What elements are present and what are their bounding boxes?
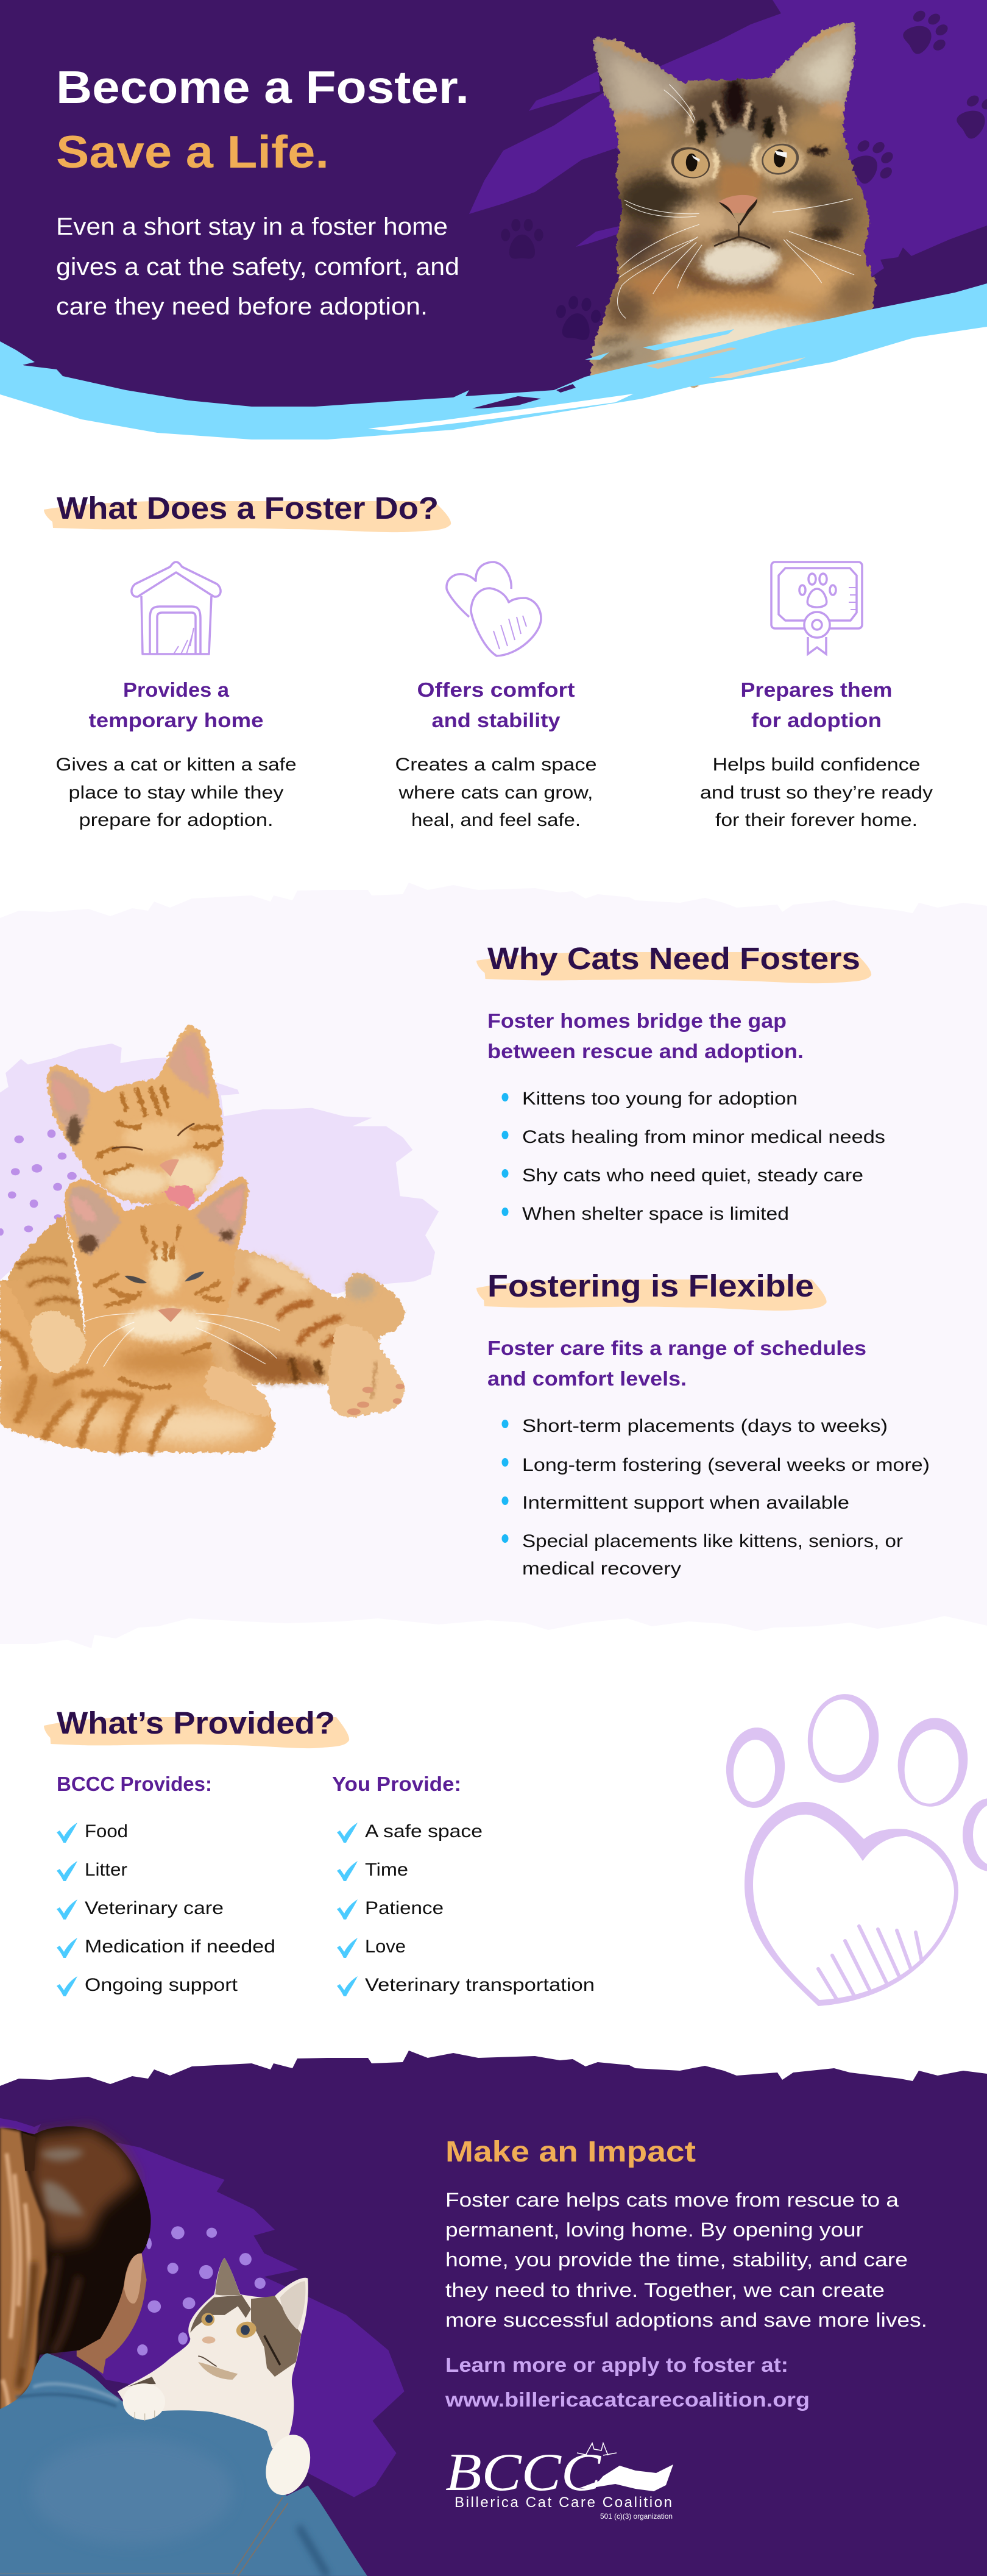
cheek markings — [618, 174, 694, 229]
panel: prepares them for adoption — [700, 562, 933, 830]
list: BCCC provides — [57, 1773, 275, 1996]
cat body — [118, 2258, 308, 2449]
icon: hearts — [447, 562, 541, 656]
illustration: woman holding cat — [0, 2118, 405, 2576]
panel: prepares them for adoption: and trust so they’re ready — [700, 783, 933, 803]
ears — [593, 38, 684, 123]
panel: offers comfort and stability: Offers comfort — [417, 678, 575, 701]
top kitten body and arm — [7, 1213, 85, 1373]
top kitten markings — [98, 1087, 221, 1174]
chin — [702, 241, 781, 284]
whiskers — [617, 84, 861, 318]
bullet list: placement types: Intermittent support when available — [522, 1493, 849, 1513]
logo: Billerica Cat Care Coalition: Billerica Cat Care Coalition — [455, 2494, 672, 2511]
icon: large paw with heart pad — [724, 1690, 987, 2006]
paws — [327, 1325, 405, 1418]
paint stroke: blue swoosh — [0, 283, 987, 439]
title: Save a Life. — [56, 126, 329, 177]
list: BCCC provides: Litter — [85, 1860, 127, 1880]
panel: prepares them for adoption: for their forever home. — [715, 810, 918, 830]
eye patches — [665, 146, 717, 185]
muzzle — [718, 166, 762, 201]
heading: make an impact: Make an Impact — [445, 2136, 696, 2168]
forehead stripes — [724, 77, 746, 124]
list: you provide: You Provide: — [332, 1773, 461, 1795]
bullet list: placement types: Special placements like kittens, seniors, or — [522, 1531, 903, 1551]
back body and tail — [196, 1251, 405, 1418]
call to action: Learn more or apply to foster at: — [445, 2354, 788, 2376]
cat paws — [123, 2383, 165, 2420]
heading: what does a foster do: What Does a Foster Do? — [57, 491, 439, 525]
nose — [714, 195, 770, 248]
panel: lavender band — [0, 883, 987, 1648]
panel: provides a temporary home: place to stay while they — [68, 783, 284, 803]
logo: Billerica Cat Care Coalition: 501 (c)(3) organization — [600, 2512, 673, 2521]
icon: house — [132, 562, 221, 654]
faces and toes — [84, 1123, 405, 1415]
bullet list: placement types: Short-term placements (days to weeks) — [522, 1416, 888, 1436]
ruff — [677, 265, 791, 291]
illustration: kittens on lavender brush — [0, 1025, 439, 1453]
panel: offers comfort and stability: where cats can grow, — [398, 783, 593, 803]
brush stroke — [0, 2118, 405, 2497]
logo: Billerica Cat Care Coalition: BCCC — [445, 2443, 601, 2502]
panel: offers comfort and stability: heal, and feel safe. — [411, 810, 581, 830]
panel: footer make an impact — [0, 2051, 987, 2576]
intro text: gives a cat the safety, comfort, and — [56, 254, 459, 280]
panel: provides a temporary home: prepare for adoption. — [79, 810, 273, 830]
intro text: Even a short stay in a foster home — [56, 213, 448, 240]
cat markings — [251, 2296, 301, 2377]
heading: what's provided: What’s Provided? — [57, 1706, 335, 1740]
hair — [0, 2126, 151, 2512]
panel: offers comfort and stability: Creates a calm space — [395, 755, 597, 775]
list: BCCC provides: Veterinary care — [85, 1898, 224, 1918]
panel: provides a temporary home: temporary home — [89, 709, 263, 731]
heading: fostering is flexible: Fostering is Flexible — [487, 1268, 814, 1303]
panel: hero header — [0, 0, 987, 439]
icon: paw certificate with ribbon — [771, 562, 862, 654]
panel: offers comfort and stability: and stability — [431, 709, 561, 731]
heading: what's provided — [44, 1706, 349, 1748]
denim jacket — [0, 2354, 367, 2576]
panel: provides a temporary home: Provides a — [123, 678, 230, 701]
head fur — [680, 82, 794, 136]
list: you provide — [332, 1773, 595, 1996]
panel: prepares them for adoption: Helps build confidence — [713, 755, 920, 775]
panel: prepares them for adoption: for adoption — [751, 709, 882, 731]
bottom kitten — [0, 1177, 275, 1453]
body text: impact paragraph — [445, 2189, 927, 2331]
kitten bodies — [0, 1025, 405, 1453]
paw prints — [501, 2, 987, 342]
list: you provide: Love — [365, 1937, 406, 1957]
ponytail — [0, 2127, 47, 2512]
bullet list: placement types: medical recovery — [522, 1559, 681, 1579]
bottom kitten markings — [95, 1227, 221, 1387]
skin: face, neck and ear — [77, 2244, 147, 2374]
top kitten head — [47, 1025, 223, 1206]
body stripes — [0, 1333, 174, 1451]
bullet list: who needs fostering: Shy cats who need quiet, steady care — [522, 1165, 863, 1186]
list: you provide: A safe space — [365, 1821, 483, 1841]
list: BCCC provides: BCCC Provides: — [57, 1773, 212, 1795]
bullet list: who needs fostering — [502, 1089, 885, 1224]
photo: tabby cat — [582, 13, 882, 394]
list: you provide: Patience — [365, 1898, 444, 1918]
intro text: care they need before adoption. — [56, 293, 428, 320]
bullet list: placement types — [502, 1416, 930, 1579]
subheading: bridge the gap — [487, 1009, 804, 1062]
tongue — [162, 1185, 196, 1209]
subheading: bridge the gap: Foster homes bridge the gap — [487, 1009, 787, 1032]
dots — [137, 2226, 266, 2355]
title — [56, 62, 469, 177]
subheading: schedules: and comfort levels. — [487, 1367, 687, 1390]
eyes — [668, 140, 802, 182]
subheading: bridge the gap: between rescue and adoption. — [487, 1040, 804, 1062]
panel: provides a temporary home — [56, 562, 296, 830]
intro text — [56, 213, 459, 320]
heading: why cats need fosters: Why Cats Need Fosters — [487, 941, 860, 976]
list: you provide: Time — [365, 1860, 408, 1880]
near paw — [205, 1367, 270, 1417]
brush blob — [0, 1044, 439, 1294]
bullet list: who needs fostering: When shelter space is limited — [522, 1204, 789, 1224]
chest — [651, 304, 825, 360]
list: BCCC provides: Ongoing support — [85, 1975, 238, 1995]
call to action: www.billericacatcarecoalition.org — [445, 2388, 810, 2411]
title: Become a Foster. — [56, 62, 469, 113]
bullet list: who needs fostering: Kittens too young for adoption — [522, 1089, 798, 1109]
call to action — [445, 2354, 810, 2411]
brush stroke behind cat — [469, 0, 987, 305]
body text: impact paragraph: permanent, loving home. By opening your — [445, 2219, 863, 2241]
panel: provides a temporary home: Gives a cat or kitten a safe — [56, 755, 296, 775]
subheading: schedules: Foster care fits a range of schedules — [487, 1337, 866, 1359]
list: you provide: Veterinary transportation — [365, 1975, 595, 1995]
body text: impact paragraph: they need to thrive. Together, we can create — [445, 2279, 885, 2301]
bullet list: who needs fostering: Cats healing from minor medical needs — [522, 1127, 885, 1147]
panel: offers comfort and stability — [395, 562, 597, 830]
body text: impact paragraph: home, you provide the time, stability, and care — [445, 2249, 908, 2271]
body text: impact paragraph: Foster care helps cats move from rescue to a — [445, 2189, 899, 2211]
dots — [0, 1130, 77, 1236]
subheading: schedules — [487, 1337, 866, 1390]
list: BCCC provides: Food — [85, 1821, 128, 1841]
logo: Billerica Cat Care Coalition — [445, 2443, 673, 2521]
body text: impact paragraph: more successful adoptions and save more lives. — [445, 2309, 927, 2331]
list: BCCC provides: Medication if needed — [85, 1937, 275, 1957]
panel: prepares them for adoption: Prepares them — [741, 678, 892, 701]
bullet list: placement types: Long-term fostering (several weeks or more) — [522, 1455, 930, 1475]
